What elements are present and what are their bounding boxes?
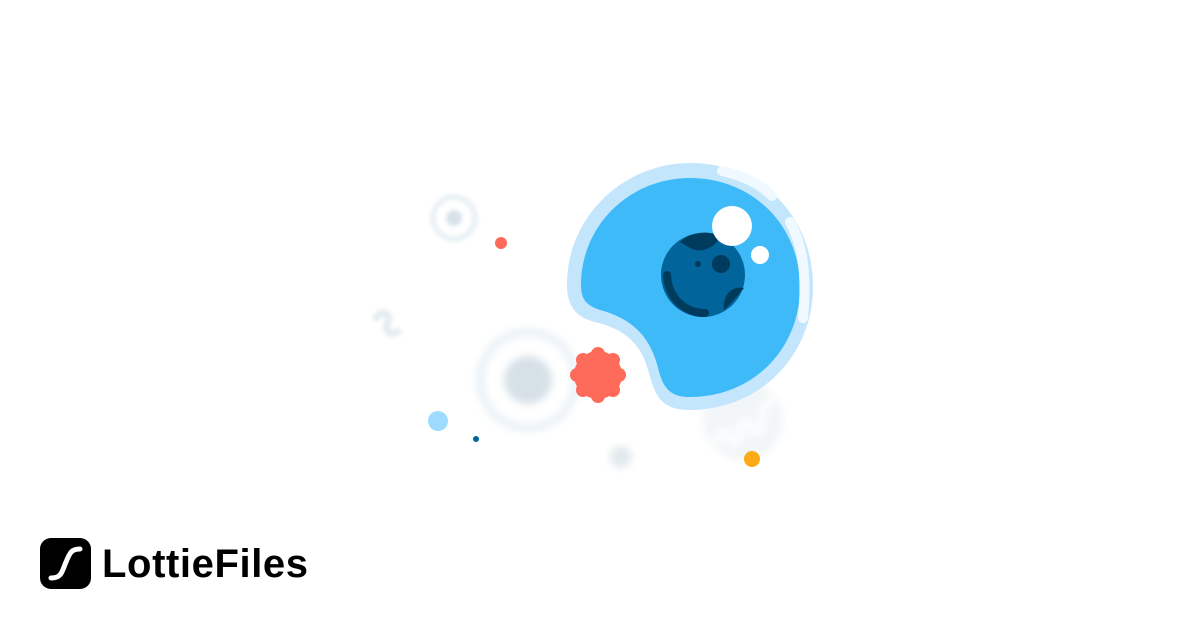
dots xyxy=(495,237,507,249)
blurred squiggle bottom right xyxy=(703,380,783,460)
icon: logo mark xyxy=(40,538,91,589)
blurred small dot bottom xyxy=(610,446,632,468)
red flower blob xyxy=(570,347,626,403)
blurred ring top-left xyxy=(433,197,475,239)
highlights xyxy=(712,206,752,246)
big blurred ring xyxy=(480,332,576,428)
rim highlights xyxy=(722,171,804,318)
blurred squiggle left xyxy=(376,313,398,333)
logo text: LottieFiles xyxy=(102,542,309,586)
logo xyxy=(40,538,309,589)
nucleus xyxy=(661,233,745,317)
cell body xyxy=(581,178,800,397)
cell outer membrane xyxy=(567,163,813,410)
